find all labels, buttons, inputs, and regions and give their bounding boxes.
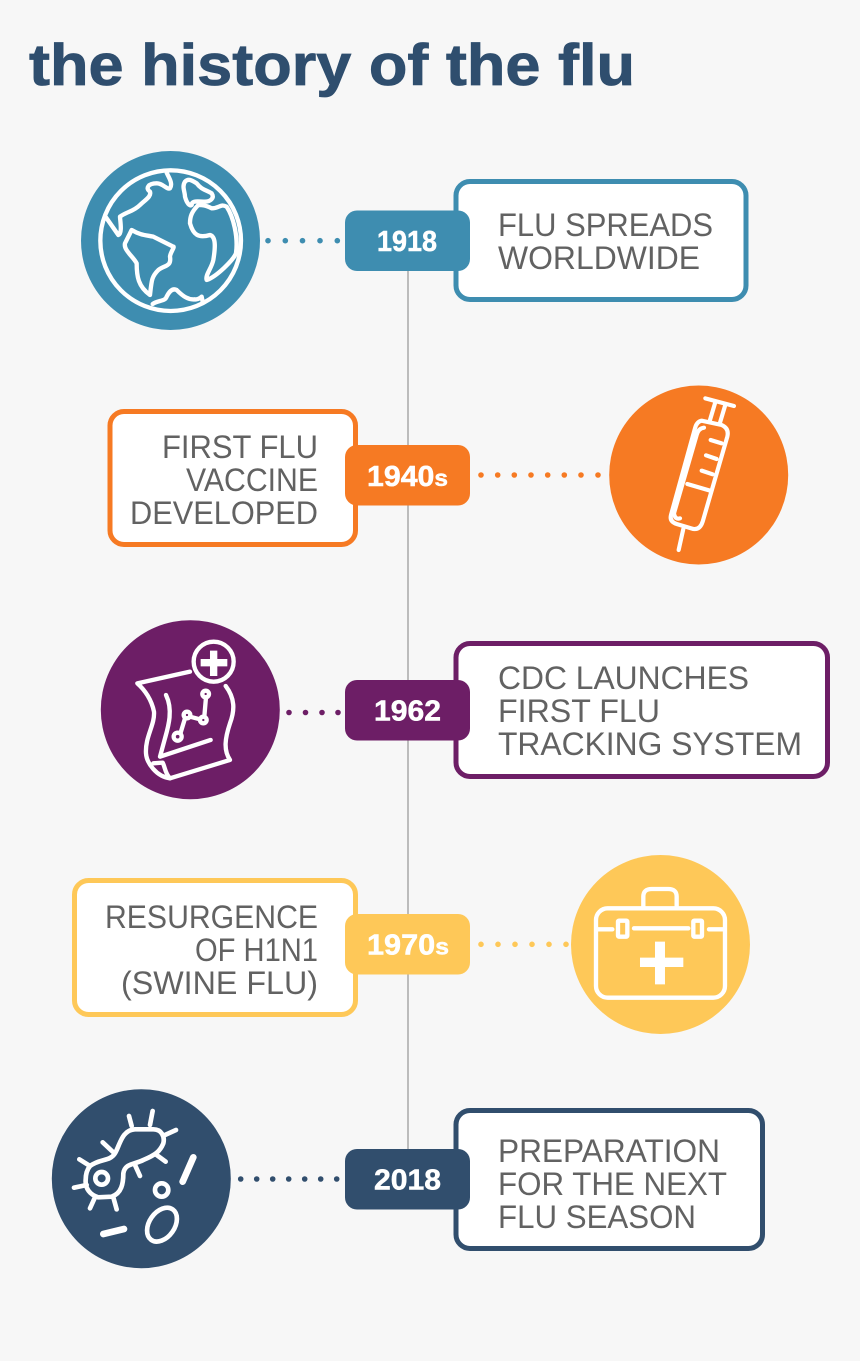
text box: PREPARATION [498, 1133, 720, 1169]
text box: FLU SEASON [498, 1199, 696, 1235]
text box [456, 1110, 762, 1248]
text box: FIRST FLU [498, 693, 660, 729]
year badge [345, 680, 470, 740]
text box: FLU SPREADS [498, 207, 713, 243]
icon: germs [52, 1089, 231, 1268]
panel: 1940s first flu vaccine [110, 386, 788, 564]
dotted connector [286, 710, 341, 715]
text box: RESURGENCE [105, 899, 318, 935]
year badge: 1962 [374, 696, 441, 728]
year badge: 1918 [377, 226, 437, 258]
text box [74, 880, 356, 1014]
icon: medical case [571, 855, 750, 1034]
text box: FOR THE NEXT [498, 1166, 727, 1202]
text box: DEVELOPED [130, 495, 318, 531]
text box [110, 412, 356, 544]
dotted connector [478, 472, 601, 478]
year badge: 2018 [374, 1164, 441, 1196]
panel: 2018 preparation for next season [52, 1089, 763, 1268]
panel: 1970s resurgence of H1N1 [74, 855, 750, 1034]
dotted connector [478, 942, 569, 947]
year badge [345, 914, 470, 974]
dotted connector [238, 1176, 340, 1182]
text box: WORLDWIDE [498, 240, 700, 276]
icon: syringe [609, 386, 788, 564]
icon: globe [81, 151, 260, 330]
year badge [345, 1149, 470, 1210]
panel: 1918 flu spreads worldwide [81, 151, 746, 330]
text box [456, 644, 828, 776]
text box: CDC LAUNCHES [498, 660, 749, 696]
year badge: 1970s [367, 930, 449, 962]
panel: 1962 CDC tracking system [101, 620, 828, 799]
text box: TRACKING SYSTEM [498, 726, 802, 762]
text box [456, 182, 746, 300]
title: the history of the flu [29, 33, 635, 98]
text box: FIRST FLU [162, 429, 318, 465]
dotted connector [265, 238, 340, 244]
year badge [345, 210, 470, 271]
year badge: 1940s [367, 461, 448, 493]
year badge [345, 445, 470, 506]
text box: VACCINE [186, 462, 318, 498]
timeline spine [407, 265, 409, 1155]
icon: map with chart and plus [101, 620, 280, 799]
text box: OF H1N1 [195, 932, 318, 968]
text box: (SWINE FLU) [121, 965, 318, 1001]
